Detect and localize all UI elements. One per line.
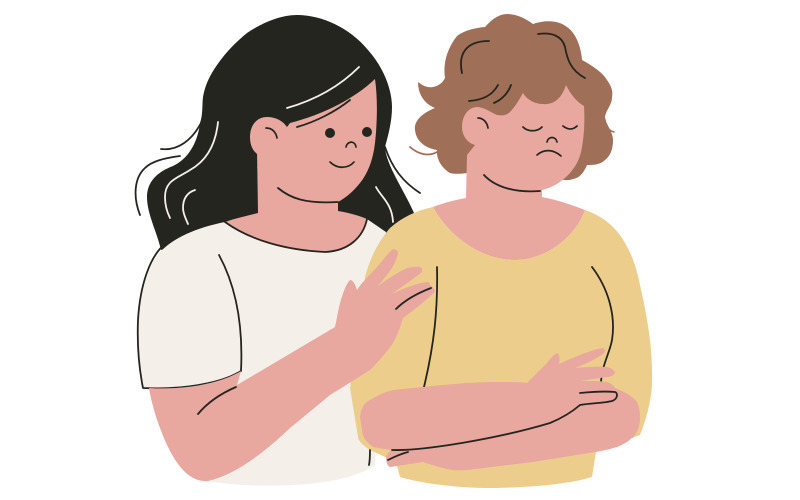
- nose and smile: [330, 142, 356, 167]
- curly brown hair: [415, 14, 613, 180]
- face and ear: [462, 85, 584, 192]
- stray curl right: [605, 120, 614, 132]
- shirt hem line: [369, 450, 370, 465]
- stray curl left: [410, 147, 437, 154]
- chin line: [484, 175, 540, 191]
- sleeve outline: [138, 244, 241, 388]
- dark long hair: [147, 15, 414, 250]
- yellow sweater: [350, 207, 652, 488]
- fringe line: [297, 100, 350, 127]
- jaw line: [278, 188, 338, 202]
- figure: woman with dark hair: [136, 15, 420, 486]
- neck and chest: [433, 155, 585, 260]
- hair strand lines: [461, 34, 585, 103]
- crossed forearms and hand: [360, 348, 640, 470]
- white hair highlights: [165, 67, 393, 224]
- figure: woman with curly brown hair: [149, 14, 652, 488]
- sweater line right: [592, 267, 613, 382]
- nose and frown: [537, 138, 561, 156]
- arm and finger lines: [388, 392, 617, 460]
- face and ear: [250, 79, 377, 204]
- arm crease: [198, 387, 236, 414]
- neck and chest: [225, 150, 367, 270]
- collar line: [225, 219, 367, 252]
- white t-shirt body: [138, 219, 386, 486]
- finger line: [396, 288, 431, 309]
- comforting arm and hand: [149, 249, 435, 481]
- ear line: [478, 118, 488, 128]
- sweater line left: [424, 267, 437, 387]
- closed eyes: [523, 126, 577, 131]
- ear line: [266, 128, 277, 138]
- loose hair strands: [136, 123, 420, 215]
- eyes: [325, 127, 372, 138]
